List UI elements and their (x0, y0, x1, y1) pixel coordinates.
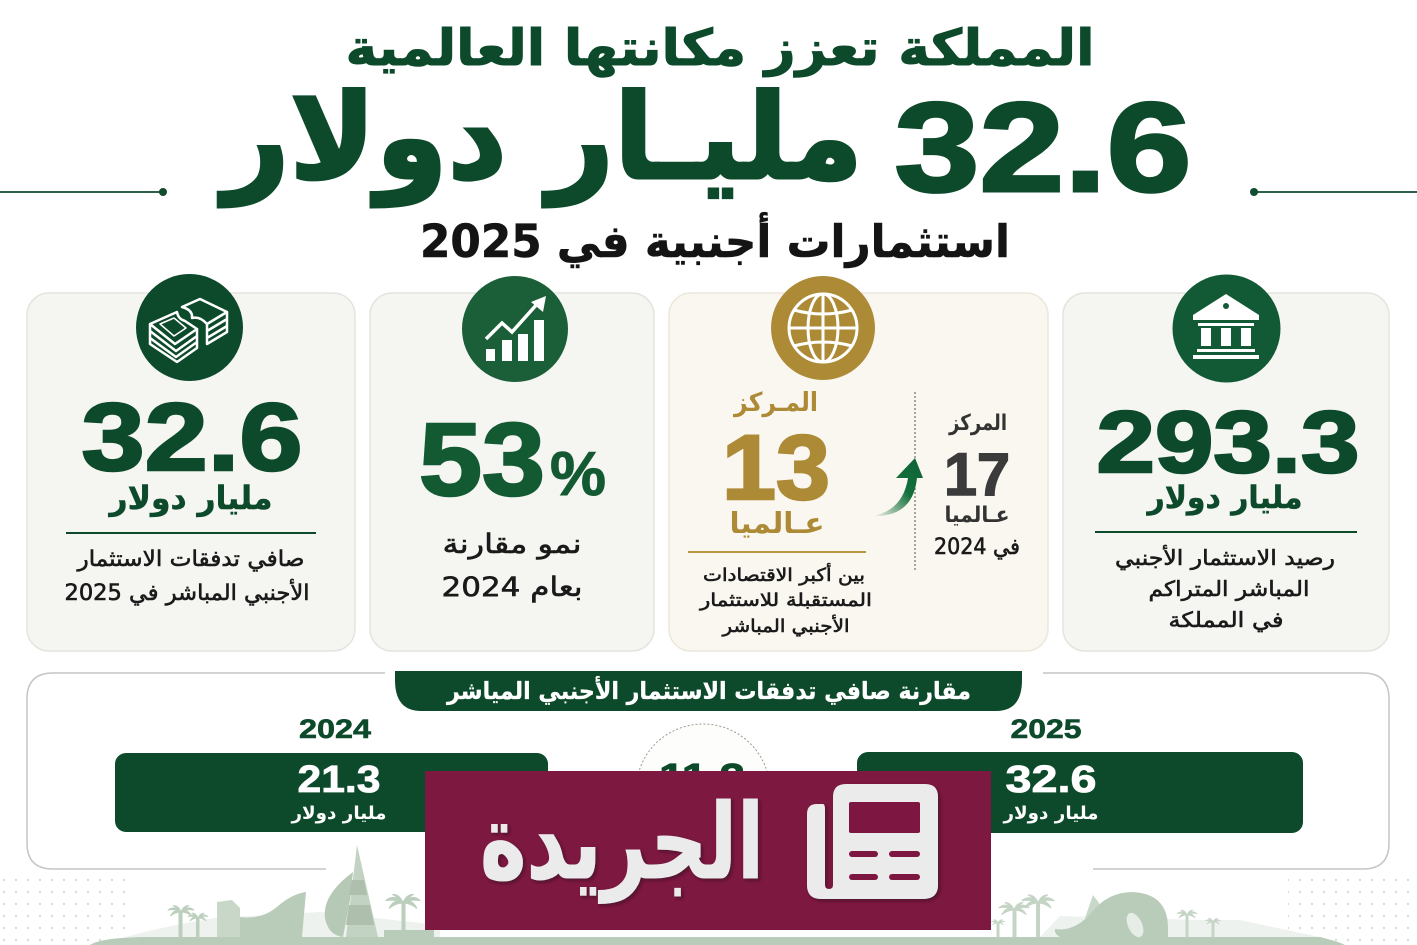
rank 17 in 2024: عـالميا (944, 503, 1010, 528)
left rule (0, 188, 167, 196)
unit: مليار دولار (108, 479, 272, 517)
palm trees left (168, 894, 420, 937)
icon: bank (1172, 274, 1280, 382)
palm trees right (991, 895, 1221, 937)
icon: globe (771, 276, 875, 380)
tower (325, 845, 378, 937)
icon: banknotes (136, 274, 243, 381)
rank 13: 13 (722, 417, 830, 519)
2025 bar (857, 714, 1303, 833)
description: الأجنبي المباشر في 2025 (64, 579, 310, 606)
rank 17 in 2024: 17 (944, 441, 1010, 508)
unit: مليار دولار (1146, 480, 1302, 516)
icon: newspaper (807, 784, 938, 899)
dot pattern right (1288, 876, 1417, 945)
panel: global rank (669, 276, 1048, 651)
comparison banner: مقارنة صافي تدفقات الاستثمار الأجنبي المياشر (446, 676, 971, 705)
description (442, 529, 582, 603)
arch building (1055, 892, 1168, 940)
rank 13 (722, 388, 830, 540)
rank 13: عـالميا (730, 506, 824, 540)
dot pattern left (0, 878, 130, 945)
icon: rising chart (462, 276, 568, 382)
2025 bar: 2025 (1010, 714, 1082, 744)
description: نمو مقارنة (442, 529, 582, 560)
title line: المملكة تعزز مكانتها العالمية (346, 19, 1094, 78)
rank 13: المـركز (732, 388, 818, 418)
ground (90, 937, 1345, 945)
panel: FDI stock (1063, 274, 1389, 651)
difference circle: 11.3 (659, 757, 745, 799)
comparison banner (395, 671, 1022, 711)
value: 293.3 (1096, 394, 1360, 491)
right rule (1250, 188, 1417, 196)
panel: net FDI flows 2025 (27, 274, 355, 651)
2025 bar: مليار دولار (1002, 803, 1098, 824)
2024 bar (115, 714, 548, 832)
2025 bar: 32.6 (1006, 759, 1096, 801)
value: 53% (419, 402, 606, 517)
description: بعام 2024 (442, 572, 582, 603)
description (699, 563, 872, 637)
rank 17 in 2024 (934, 411, 1020, 560)
watermark banner (425, 771, 991, 930)
description: في المملكة (1168, 608, 1284, 632)
description (1115, 545, 1335, 632)
description: الأجنبي المباشر (721, 615, 850, 637)
description: المباشر المتراكم (1148, 577, 1310, 602)
rank 17 in 2024: المركز (948, 411, 1007, 436)
description: المستقبلة للاستثمار (699, 590, 872, 611)
panel: comparison (27, 671, 1389, 869)
main figure: billion dollars: مليـار دولار (218, 68, 863, 207)
description: صافي تدفقات الاستثمار (76, 547, 305, 572)
description (64, 547, 310, 606)
2024 bar: 2024 (299, 714, 371, 744)
heading block (218, 19, 1192, 268)
value: 53%: 53 (419, 402, 545, 517)
panel: growth (370, 276, 654, 651)
skyline (0, 845, 1417, 945)
main figure: 32.6: 32.6 (894, 76, 1192, 218)
description: بين أكبر الاقتصادات (703, 563, 865, 586)
difference circle (636, 724, 770, 858)
rank 17 in 2024: في 2024 (934, 535, 1020, 560)
value: 32.6 (82, 384, 302, 491)
watermark wordmark: الجريدة (480, 781, 764, 903)
curved building (217, 892, 306, 937)
arrow up (873, 458, 923, 516)
subtitle: استثمارات أجنبية في 2025 (420, 212, 1010, 268)
2024 bar: 21.3 (298, 759, 380, 801)
description: رصيد الاستثمار الأجنبي (1115, 545, 1335, 570)
value: 53%: % (550, 440, 606, 509)
2024 bar: مليار دولار (290, 803, 386, 824)
